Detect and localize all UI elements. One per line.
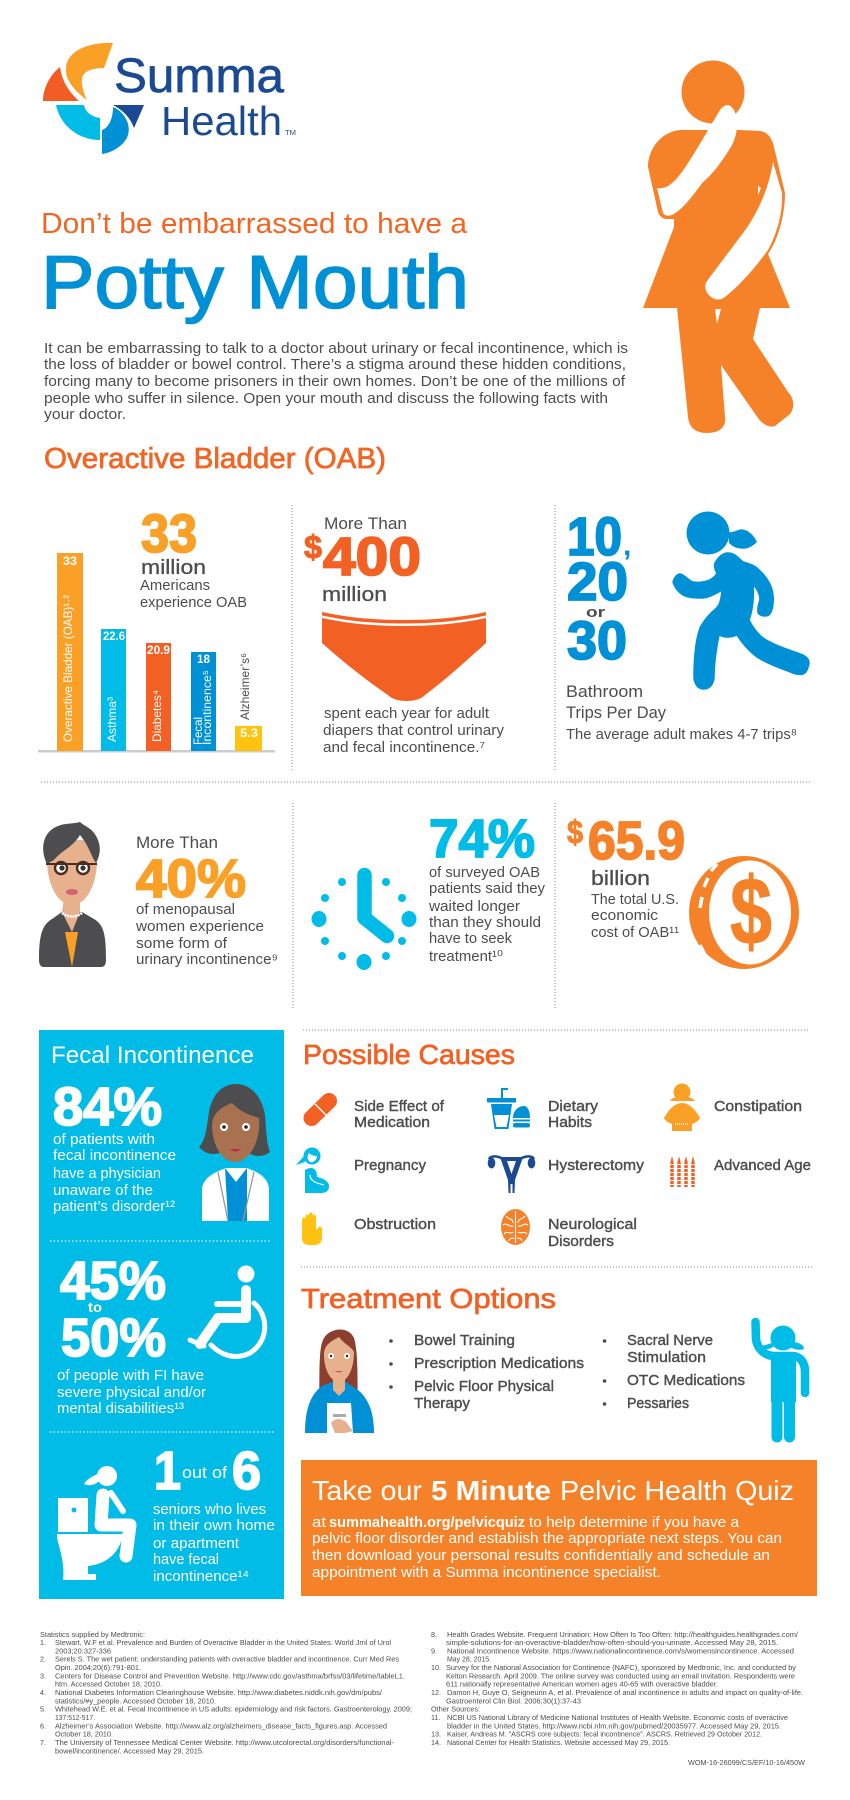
icon: underwear [322, 612, 486, 701]
references: right column: National Incontinence Website. https://www.nationalincontinence.com/s/womensincontinence. Accessed [447, 1646, 794, 1655]
stat: 45 to 50 percent: mental disabilities¹³ [57, 1400, 184, 1417]
references: left column: 2003;20:327-336 [55, 1647, 111, 1656]
stat: 74 percent waited: 74% [429, 809, 535, 869]
references: right column: 11. [431, 1713, 440, 1722]
cause: Advanced Age: Advanced Age [714, 1157, 811, 1174]
stat: 1 out of 6: out of [182, 1463, 227, 1482]
references: right column: Health Grades Website. Frequent Urination: How Often Is Too Often: http://healthguides.healthgrades.com/ [447, 1630, 798, 1639]
references: right column: simple-solutions-for-an-overactive-bladder/how-often-should-you-urinate. Accessed May 28, 2015. [446, 1638, 778, 1647]
treatment list: left column: Therapy [414, 1395, 471, 1412]
references: left column: The University of Tennessee Medical Center Website. http://www.utcolorectal.org/disorders/functional- [55, 1738, 395, 1747]
references: left column [40, 1630, 412, 1756]
cause: Neurological Disorders: Disorders [548, 1233, 614, 1250]
stat: 45 to 50 percent: severe physical and/or [57, 1384, 206, 1401]
references: left column: 5. [40, 1705, 46, 1714]
cause: Hysterectomy: Hysterectomy [548, 1157, 645, 1174]
bar chart: conditions: Asthma³ [105, 697, 119, 742]
stat: 40 percent of menopausal women [39, 822, 278, 968]
quiz heading: Take our [312, 1475, 422, 1506]
stat: 400 million: million [322, 584, 387, 606]
references: right column: Survey for the National Association for Continence (NAFC), sponsored by Medtronic, Inc. and conducted by [446, 1663, 796, 1672]
stat: 84 percent: unaware of the [53, 1182, 153, 1199]
icon: dollar coin [689, 856, 799, 969]
bar chart: conditions: 18 [197, 652, 210, 666]
stat: 74 percent waited [312, 809, 545, 970]
woman figure: crossing legs [643, 60, 793, 433]
heading: tagline: Don’t be embarrassed to have a [41, 208, 468, 240]
quiz body: pelvic floor disorder and establish the appropriate next steps. You can [312, 1530, 782, 1547]
stat: bathroom trips: 20 [567, 552, 628, 612]
references: right column: bladder in the United States. http://www.ncbi.nlm.nih.gov/pubmed/20035977. Accessed May 29, 2015. [447, 1722, 781, 1731]
cause: Side Effect of Medication [354, 1098, 445, 1131]
treatment list: left column: Pelvic Floor Physical [414, 1378, 554, 1395]
bar chart: conditions: 22.6 [103, 629, 125, 643]
treatment list: right column: Sacral Nerve [627, 1332, 713, 1349]
icon: clock [312, 875, 416, 970]
stat: bathroom trips: , [623, 529, 631, 562]
stat: 1 out of 6: 1 [154, 1441, 181, 1501]
references: left column: Statistics supplied by Medtronic: [40, 1630, 145, 1639]
stat: 74 percent waited: than they should [429, 914, 541, 931]
stat: 33 million: experience OAB [140, 594, 247, 611]
treatment list: right column: OTC Medications [627, 1372, 745, 1389]
references: left column: Serels S. The wet patient: understanding patients with overactive bladder and incontinence. Curr Med Res [55, 1655, 399, 1664]
icon: pill [312, 1101, 329, 1118]
icon: brain [501, 1209, 530, 1245]
bar chart: conditions: 5.3 [240, 726, 258, 740]
bar chart: conditions: 20.9 [147, 643, 170, 657]
stat: 1 out of 6: seniors who lives [153, 1501, 266, 1518]
references: left column: 2. [40, 1655, 46, 1664]
bar chart: conditions: Incontinence⁵ [200, 670, 214, 745]
bar chart: conditions [38, 553, 275, 752]
heading: Possible Causes: Possible Causes [303, 1039, 515, 1070]
stat: 74 percent waited: of surveyed OAB [429, 864, 540, 881]
cause: Side Effect of Medication: Side Effect of [354, 1098, 445, 1115]
stat: 84 percent: patient’s disorder¹² [53, 1198, 175, 1215]
treatment list: right column: Pessaries [627, 1395, 689, 1412]
stat: 65.9 billion: The total U.S. [591, 891, 679, 908]
intro paragraph: forcing many to become prisoners in their own homes. Don’t be one of the millions of [44, 373, 626, 390]
stat: 1 out of 6: in their own home [153, 1517, 275, 1534]
references: right column: National Center for Health Statistics. Website accessed May 29, 2015. [447, 1738, 670, 1747]
stat: 40 percent of menopausal women: of menopausal [136, 901, 235, 918]
references: right column: Kaiser, Andreas M. "ASCRS core subjects: fecal incontinence". ASCRS. Retrieved 29 October 2012. [447, 1730, 762, 1739]
references: right column: 14. [431, 1738, 441, 1747]
references: right column: 13. [431, 1730, 441, 1739]
stat: bathroom trips: or [586, 604, 605, 621]
intro paragraph: the loss of bladder or bowel control. There’s a stigma around these hidden conditions, [44, 356, 626, 373]
references: left column: 6. [40, 1722, 46, 1731]
bar chart: conditions: Overactive Bladder (OAB)¹·² [61, 595, 75, 742]
stat: 74 percent waited: waited longer [428, 898, 520, 915]
references: right column [431, 1630, 803, 1747]
icon: constipation figure [664, 1084, 700, 1131]
treatment list: right column: Stimulation [627, 1349, 706, 1366]
intro paragraph: your doctor. [44, 406, 126, 423]
stat: 45 to 50 percent: to [88, 1299, 102, 1315]
stat: 84 percent: fecal incontinence [53, 1147, 176, 1164]
stat: 400 million: $ [304, 529, 322, 565]
quiz body [312, 1514, 782, 1581]
treatment list: left column: Bowel Training [414, 1332, 515, 1349]
stat: 33 million: Americans [140, 577, 210, 594]
callout: quiz [301, 1460, 817, 1596]
references: right column: Other Sources: [431, 1705, 480, 1714]
stat: 1 out of 6: or apartment [153, 1535, 240, 1552]
references: left column: Whitehead W.E. et al. Fecal Incontinence in US adults: epidemiology and risk factors. Gastroenterology. 2009; [55, 1705, 412, 1714]
logo: Summa Health [43, 43, 296, 154]
logo: Summa Health: Summa [114, 50, 284, 103]
stat: bathroom trips: The average adult makes 4-7 trips⁸ [566, 726, 797, 743]
references: right column: 12. [431, 1688, 441, 1697]
stat: 65.9 billion [567, 811, 799, 969]
cause: Obstruction: Obstruction [354, 1216, 436, 1233]
references: left column: 7. [40, 1738, 46, 1747]
icon: dollar coin: $ [730, 858, 772, 965]
references: right column: 10. [431, 1663, 441, 1672]
cause: Neurological Disorders [548, 1216, 637, 1250]
cause: Dietary Habits: Habits [548, 1114, 592, 1131]
bar chart: conditions: 33 [63, 554, 77, 568]
references: left column: 137:512-517. [55, 1713, 95, 1722]
stat: bathroom trips: 10 [567, 507, 622, 567]
icon: walking person [673, 512, 809, 689]
references: left column: Opin. 2004;20(6):791-801. [55, 1663, 141, 1672]
stat: 400 million: diapers that control urinary [323, 722, 505, 739]
stat: 45 to 50 percent [57, 1251, 206, 1417]
quiz heading: Pelvic Health Quiz [560, 1475, 794, 1506]
stat: 40 percent of menopausal women: women experience [135, 918, 264, 935]
references: right column: Gastroenterol Clin Biol. 2006;30(1):37-43 [446, 1697, 581, 1706]
heading: Treatment Options: Treatment Options [301, 1283, 556, 1314]
stat: 74 percent waited: have to seek [429, 930, 512, 947]
stat: 40 percent of menopausal women: some form of [136, 935, 228, 952]
stat: bathroom trips [566, 507, 809, 743]
stat: 33 million: 33 [141, 504, 197, 564]
cause: Pregnancy: Pregnancy [354, 1157, 426, 1174]
icon: older woman with glasses [39, 822, 106, 967]
quiz body: to help determine if you have a [529, 1514, 740, 1531]
references: right column: NCBI US National Library of Medicine National Institutes of Health Website. Economic costs of overactive [447, 1713, 788, 1722]
cause: Dietary Habits: Dietary [548, 1098, 599, 1115]
references: left column: 1. [40, 1638, 46, 1647]
heading: Fecal Incontinence: Fecal Incontinence [51, 1042, 254, 1069]
stat: 74 percent waited: patients said they [429, 880, 545, 897]
quiz heading: 5 Minute [431, 1475, 551, 1506]
references: left column: Centers for Disease Control and Prevention Website. http://www.cdc.gov/asthma/brfss/03/lifetime/tableL1. [55, 1671, 405, 1680]
icon: woman with clipboard [305, 1330, 374, 1433]
bar chart: conditions: Alzheimer’s⁶ [238, 653, 252, 720]
bar chart: conditions: Fecal [191, 717, 205, 745]
logo: Summa Health: TM [285, 130, 296, 137]
logo: Summa Health: Health [161, 98, 282, 144]
stat: 40 percent of menopausal women: More Than [136, 833, 218, 852]
intro paragraph: It can be embarrassing to talk to a doctor about urinary or fecal incontinence, which is [44, 340, 628, 357]
stat: 1 out of 6: have fecal [153, 1551, 219, 1568]
stat: 45 to 50 percent: 45% [60, 1251, 166, 1311]
quiz body: then download your personal results confidentially and schedule an [312, 1547, 770, 1564]
references: left column: October 18, 2010. [55, 1730, 113, 1739]
stat: 84 percent [53, 1077, 176, 1215]
stat: 65.9 billion: economic [591, 907, 659, 924]
bar chart: conditions: Diabetes⁴ [150, 690, 164, 742]
cause: Dietary Habits [548, 1098, 599, 1131]
treatment list: left column: Prescription Medications [414, 1355, 584, 1372]
references: left column: Alzheimer’s Association Website. http://www.alz.org/alzheimers_disease_facts_figures.asp. Accessed [55, 1722, 387, 1731]
icon: cup and burger [487, 1089, 530, 1129]
references: right column: 9. [431, 1646, 437, 1655]
panel: Fecal Incontinence [39, 1030, 284, 1599]
stat: 65.9 billion: $ [567, 814, 583, 850]
quiz body: appointment with a Summa incontinence specialist. [312, 1564, 661, 1581]
stat: 84 percent: have a physician [53, 1165, 161, 1182]
cause: Constipation: Constipation [714, 1098, 802, 1115]
references: left column: 4. [40, 1688, 46, 1697]
references: right column: Kelton Research. April 2009. The online survey was conducted using an email invitation. Respondents were [446, 1671, 795, 1680]
quiz body: at [312, 1514, 327, 1531]
treatment list: left column [389, 1332, 584, 1412]
stat: 400 million: and fecal incontinence.⁷ [323, 739, 485, 756]
icon: birthday candles [670, 1156, 695, 1187]
references: right column: Damon H, Guye O, Seigneurin A, et al. Prevalence of anal incontinence in adults and impact on quality-of-life. [447, 1688, 803, 1697]
quiz heading [312, 1475, 794, 1506]
references: left column: statistics/#y_people. Accessed October 18, 2010. [55, 1697, 216, 1706]
stat: 84 percent: of patients with [53, 1131, 155, 1148]
references: left column: htm. Accessed October 18, 2010. [55, 1680, 162, 1689]
treatment list: right column [603, 1332, 745, 1412]
stat: 65.9 billion: 65.9 [588, 811, 685, 871]
references: left column: National Diabetes Information Clearinghouse Website. http://www.diabetes.niddk.nih.gov/dm/pubs/ [55, 1688, 382, 1697]
stat: 400 million: More Than [324, 514, 407, 533]
references: left column: bowel/incontinence/. Accessed May 29, 2015. [55, 1747, 204, 1756]
stat: 33 million [140, 504, 247, 611]
icon: pregnant woman [296, 1148, 329, 1193]
stat: 1 out of 6 [153, 1441, 275, 1585]
stat: 1 out of 6: 6 [232, 1441, 261, 1501]
intro paragraph: people who suffer in silence. Open your mouth and discuss the following facts with [44, 390, 608, 407]
stat: 40 percent of menopausal women: 40% [136, 849, 246, 909]
stat: 74 percent waited: treatment¹⁰ [429, 948, 503, 965]
icon: wheelchair [190, 1266, 265, 1356]
icon: uterus [488, 1156, 535, 1193]
causes grid [296, 1084, 811, 1250]
references: right column: 8. [431, 1630, 437, 1639]
stat: 40 percent of menopausal women: urinary incontinence⁹ [136, 951, 278, 968]
title: Potty Mouth: Potty Mouth [41, 240, 469, 324]
document code: WOM-16-26099/CS/EF/10-16/450W [688, 1758, 805, 1767]
references: right column: May 28, 2015. [447, 1655, 491, 1664]
stat: 84 percent: 84% [53, 1077, 162, 1137]
stat: 400 million: spent each year for adult [324, 705, 490, 722]
cause: Side Effect of Medication: Medication [354, 1114, 430, 1131]
references: right column: 611 nationally representative American women ages 40-65 with overactive bladder. [446, 1680, 718, 1689]
intro paragraph [44, 340, 628, 423]
stat: 45 to 50 percent: of people with FI have [57, 1367, 204, 1384]
icon: person on toilet [57, 1466, 130, 1580]
references: left column: Stewart, W.F et al. Prevalence and Burden of Overactive Bladder in the United States. World Jrnl of Urol [55, 1638, 391, 1647]
heading: Overactive Bladder: Overactive Bladder (OAB) [44, 443, 386, 475]
stat: bathroom trips: Trips Per Day [566, 703, 666, 722]
quiz body: summahealth.org/pelvicquiz [329, 1514, 525, 1531]
stat: 65.9 billion: cost of OAB¹¹ [591, 924, 679, 941]
stat: 33 million: million [141, 557, 206, 579]
stat: bathroom trips: Bathroom [566, 682, 643, 701]
icon: raised hand [302, 1212, 322, 1245]
stat: 400 million: 400 [323, 527, 421, 587]
icon: doctor [199, 1084, 270, 1221]
stat: 65.9 billion: billion [591, 868, 650, 890]
stat: 400 million [304, 514, 505, 756]
stat: 45 to 50 percent: 50% [61, 1308, 166, 1368]
icon: person raising hand [756, 1322, 805, 1437]
stat: 1 out of 6: incontinence¹⁴ [153, 1568, 249, 1585]
cause: Neurological Disorders: Neurological [548, 1216, 637, 1233]
references: left column: 3. [40, 1671, 46, 1680]
stat: bathroom trips: 30 [567, 611, 627, 671]
